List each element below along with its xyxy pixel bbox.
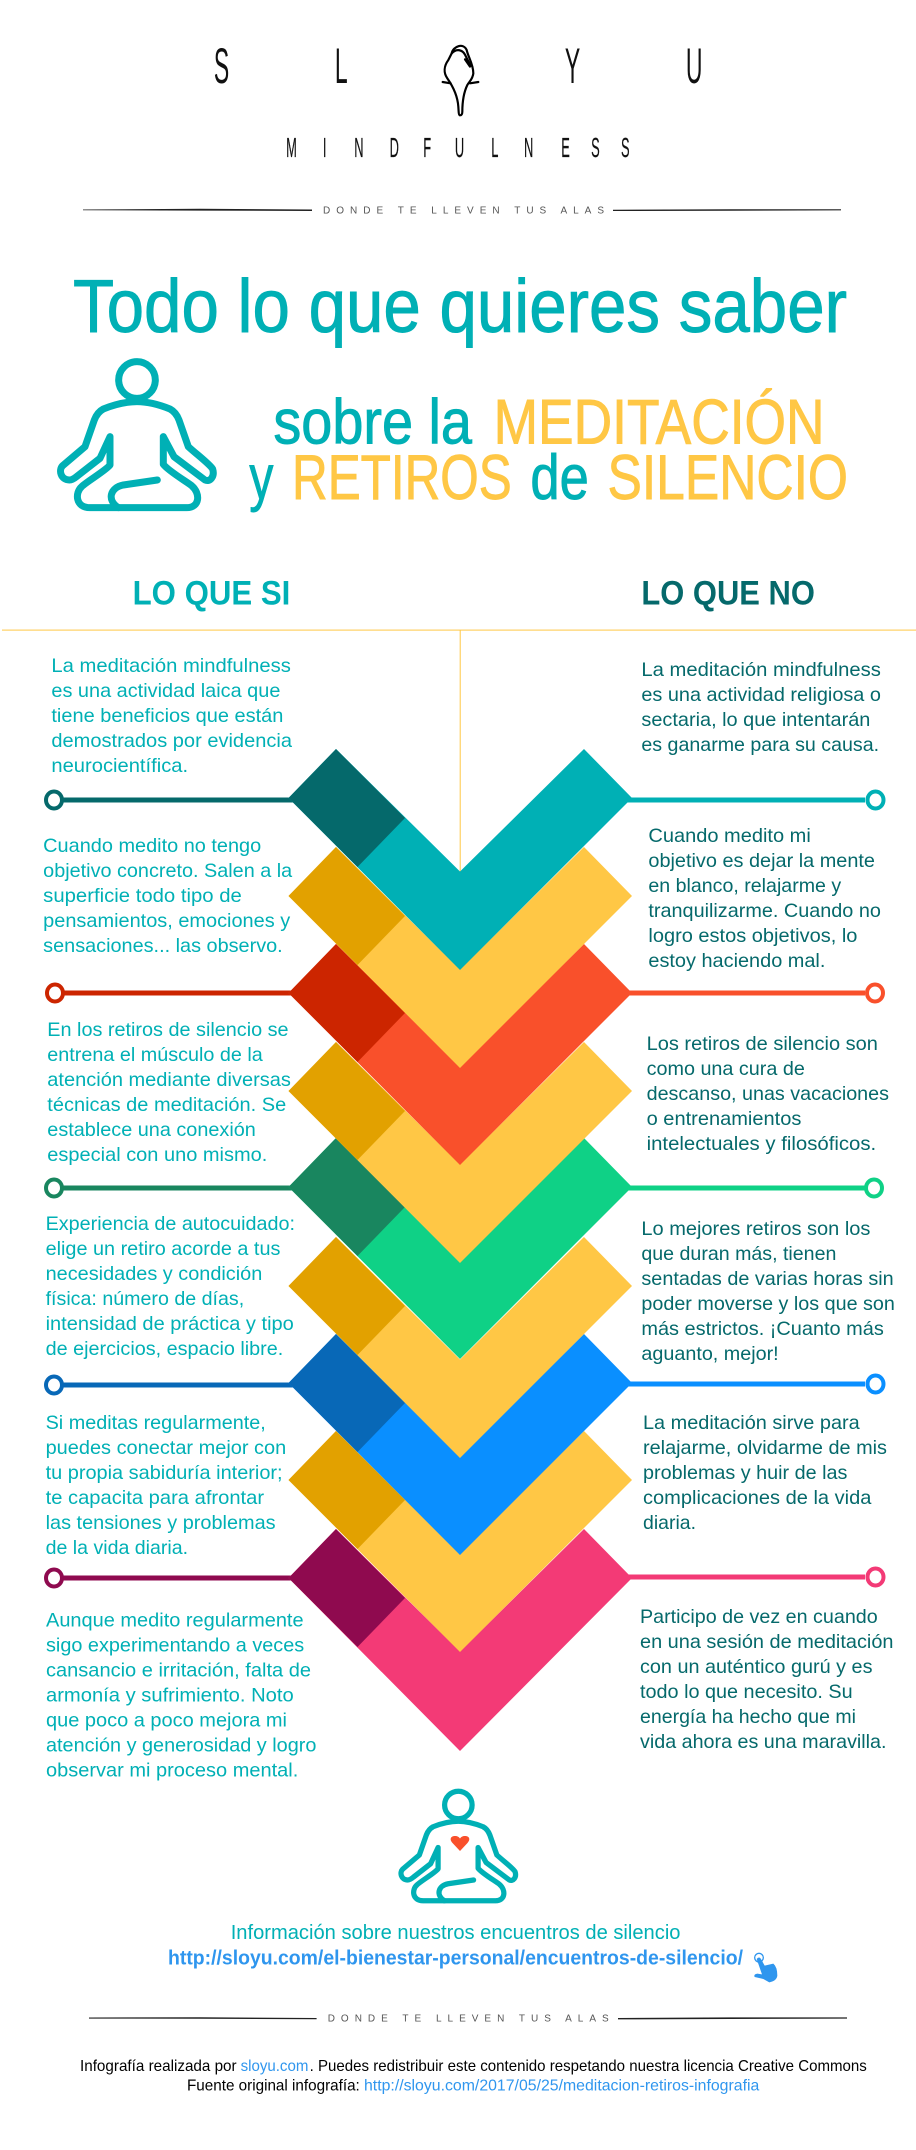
text: si 4: de ejercicios, espacio libre.: [46, 1338, 283, 1360]
text: si 6: sigo experimentando a veces: [46, 1635, 304, 1657]
text: no 4: poder moverse y los que son: [641, 1293, 895, 1315]
text: no 6: en una sesión de meditación: [640, 1631, 894, 1653]
text: no 5: problemas y huir de las: [643, 1462, 848, 1484]
subtitle: MEDITACIÓN: [494, 388, 825, 458]
text: si 6: [46, 1610, 317, 1782]
icon: meditating person: [61, 362, 213, 508]
logo subtitle: MINDFULNESS: [286, 131, 630, 163]
footer credits: . Puedes redistribuir este contenido respetando nuestra licencia Creative Commons: [310, 2058, 867, 2075]
text: si 1: neurocientífica.: [51, 755, 188, 777]
text: si 2: superficie todo tipo de: [43, 885, 242, 907]
subtitle: SILENCIO: [608, 443, 848, 513]
text: no 6: Participo de vez en cuando: [640, 1606, 878, 1628]
text: si 6: atención y generosidad y logro: [46, 1735, 317, 1757]
text: no 3: [647, 1033, 889, 1155]
text: no 1: La meditación mindfulness: [641, 659, 881, 681]
text: si 5: de la vida diaria.: [46, 1537, 188, 1559]
heading: lo que si: LO QUE SI: [133, 574, 290, 612]
text: si 2: Cuando medito no tengo: [43, 835, 261, 857]
text: si 5: tu propia sabiduría interior;: [46, 1462, 283, 1484]
text: no 5: La meditación sirve para: [643, 1412, 860, 1434]
chevron: yellow 1: [288, 847, 632, 1068]
text: si 4: elige un retiro acorde a tus: [46, 1238, 281, 1260]
text: no 6: energía ha hecho que mi: [640, 1706, 856, 1728]
text: no 5: relajarme, olvidarme de mis: [643, 1437, 887, 1459]
text: si 6: que poco a poco mejora mi: [46, 1710, 287, 1732]
chevron: red: [288, 944, 632, 1165]
chevron stack: [288, 749, 632, 1751]
text: no 6: con un auténtico gurú y es: [640, 1656, 873, 1678]
text: no 3: como una cura de: [647, 1058, 805, 1080]
text: si 5: puedes conectar mejor con: [46, 1437, 286, 1459]
footer credits: http://sloyu.com/2017/05/25/meditacion-retiros-infografia: [364, 2078, 759, 2094]
title: Todo lo que quieres saber: [73, 264, 847, 348]
text: no 5: complicaciones de la vida: [643, 1487, 872, 1509]
chevron: blue: [288, 1334, 632, 1555]
footer credits: [80, 2058, 867, 2094]
connector row 3: [46, 1180, 882, 1196]
text: si 5: Si meditas regularmente,: [46, 1412, 266, 1434]
call to action: Información sobre nuestros encuentros de silencio: [231, 1921, 680, 1944]
text: no 4: sentadas de varias horas sin: [641, 1268, 894, 1290]
text: si 1: es una actividad laica que: [51, 680, 280, 702]
text: no 3: Los retiros de silencio son: [647, 1033, 878, 1055]
chevron: yellow 2: [288, 1042, 632, 1263]
icon: heart: [451, 1836, 469, 1851]
subtitle: sobre la: [273, 388, 473, 458]
chevron: yellow 4: [288, 1431, 632, 1652]
text: no 3: descanso, unas vacaciones: [647, 1083, 889, 1105]
text: si 3: entrena el músculo de la: [47, 1044, 263, 1066]
text: no 2: logro estos objetivos, lo: [648, 925, 858, 947]
tagline bottom: DONDE TE LLEVEN TUS ALAS: [328, 2014, 609, 2024]
text: si 2: objetivo concreto. Salen a la: [43, 860, 292, 882]
text: si 3: En los retiros de silencio se: [47, 1019, 289, 1041]
icon: meditating person with heart: [401, 1791, 516, 1901]
text: no 6: vida ahora es una maravilla.: [640, 1731, 886, 1753]
text: no 6: todo lo que necesito. Su: [640, 1681, 853, 1703]
text: si 6: Aunque medito regularmente: [46, 1610, 304, 1632]
text: si 6: armonía y sufrimiento. Noto: [46, 1685, 294, 1707]
call to action: [168, 1921, 743, 1969]
text: no 2: tranquilizarme. Cuando no: [648, 900, 881, 922]
text: si 4: física: número de días,: [46, 1288, 244, 1310]
text: no 2: objetivo es dejar la mente: [648, 850, 875, 872]
text: si 6: observar mi proceso mental.: [46, 1760, 298, 1782]
text: no 3: o entrenamientos: [647, 1108, 802, 1130]
text: no 4: que duran más, tienen: [641, 1243, 836, 1265]
text: no 4: aguanto, mejor!: [641, 1343, 779, 1365]
heading: lo que no: LO QUE NO: [641, 574, 815, 612]
text: no 1: es una actividad religiosa o: [641, 684, 881, 706]
text: si 3: atención mediante diversas: [47, 1069, 291, 1091]
subtitle: [249, 388, 848, 513]
text: si 3: [47, 1019, 291, 1166]
text: no 5: diaria.: [643, 1512, 696, 1534]
connector row 5: [46, 1568, 884, 1586]
tagline top: DONDE TE LLEVEN TUS ALAS: [323, 206, 604, 217]
text: no 6: [640, 1606, 894, 1753]
connector row 2: [47, 984, 883, 1002]
text: si 4: intensidad de práctica y tipo: [46, 1313, 294, 1335]
text: no 1: es ganarme para su causa.: [641, 734, 879, 756]
chevron: green: [288, 1138, 632, 1359]
text: no 1: [641, 659, 881, 756]
subtitle: de: [530, 443, 589, 513]
text: si 3: técnicas de meditación. Se: [47, 1094, 286, 1116]
icon: bird: [443, 46, 478, 115]
chevron: pink: [288, 1529, 632, 1751]
text: si 1: La meditación mindfulness: [51, 655, 291, 677]
text: si 3: especial con uno mismo.: [47, 1144, 267, 1166]
text: si 4: [46, 1213, 295, 1360]
footer credits: sloyu.com: [241, 2058, 308, 2075]
footer credits: Infografía realizada por: [80, 2058, 237, 2075]
text: si 4: necesidades y condición: [46, 1263, 262, 1285]
text: si 2: pensamientos, emociones y: [43, 910, 290, 932]
text: no 2: [648, 825, 881, 972]
text: no 3: intelectuales y filosóficos.: [647, 1133, 876, 1155]
chevron: yellow 3: [288, 1237, 632, 1458]
text: si 1: [51, 655, 292, 777]
text: si 5: las tensiones y problemas: [46, 1512, 276, 1534]
call to action: http://sloyu.com/el-bienestar-personal/encuentros-de-silencio/: [168, 1947, 743, 1969]
text: si 2: sensaciones... las observo.: [43, 935, 283, 957]
text: si 1: tiene beneficios que están: [51, 705, 283, 727]
text: si 3: establece una conexión: [47, 1119, 256, 1141]
text: no 5: [643, 1412, 887, 1534]
icon: pointing hand: [754, 1953, 777, 1982]
connector row 1: [46, 792, 884, 808]
chevron: teal: [288, 749, 632, 970]
subtitle: y: [249, 443, 274, 513]
text: si 1: demostrados por evidencia: [51, 730, 292, 752]
text: si 4: Experiencia de autocuidado:: [46, 1213, 295, 1235]
logo wordmark: SLYU: [214, 39, 702, 95]
connector row 4: [46, 1376, 884, 1394]
text: no 4: más estrictos. ¡Cuanto más: [641, 1318, 884, 1340]
subtitle: RETIROS: [292, 443, 512, 513]
text: no 4: [641, 1218, 895, 1365]
footer credits: Fuente original infografía:: [187, 2078, 360, 2094]
text: no 2: Cuando medito mi: [648, 825, 811, 847]
text: no 2: estoy haciendo mal.: [648, 950, 825, 972]
text: no 4: Lo mejores retiros son los: [641, 1218, 871, 1240]
text: si 2: [43, 835, 292, 957]
logo: Sloyu Mindfulness: [214, 39, 702, 163]
text: si 5: [46, 1412, 286, 1559]
text: no 1: sectaria, lo que intentarán: [641, 709, 870, 731]
text: no 2: en blanco, relajarme y: [648, 875, 841, 897]
text: si 6: cansancio e irritación, falta de: [46, 1660, 311, 1682]
text: si 5: te capacita para afrontar: [46, 1487, 265, 1509]
